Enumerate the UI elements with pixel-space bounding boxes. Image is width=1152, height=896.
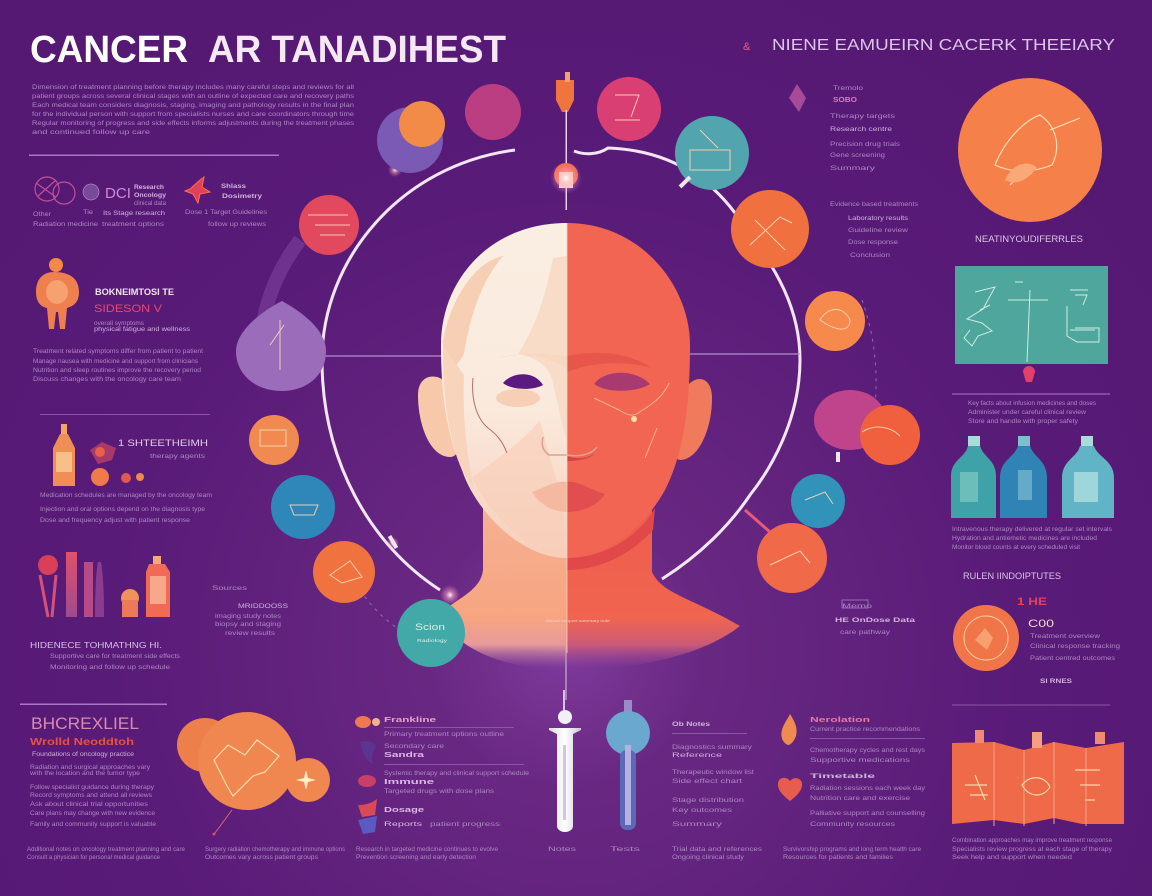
small connector capsules [388, 176, 840, 549]
bottom text strip: Tests [610, 847, 640, 853]
icon row: organs: Other [33, 212, 51, 218]
text block: person: Nutrition and sleep routines improve the recovery period [33, 368, 201, 374]
text block: right upper [830, 202, 918, 259]
panel: far bottom list: Nutrition care and exercise [810, 796, 911, 802]
bottom text strip: Consult a physician for personal medical guidance [27, 855, 161, 861]
icon: star cell [185, 177, 210, 203]
bottom text strip: Seek help and support when needed [952, 855, 1072, 861]
panel: bottom left text: Foundations of oncology practice [32, 752, 135, 758]
icon: orange heart blobs [177, 712, 330, 836]
panel: bottom list left: Secondary care [384, 744, 445, 750]
bubble line art [260, 95, 900, 583]
icon: large orange circle [958, 78, 1102, 222]
bar chart: vials [38, 552, 170, 617]
panel: bottom left text: BHCREXLIEL [31, 714, 139, 733]
divider [952, 394, 1110, 395]
left ear [418, 376, 462, 457]
text block: person [33, 349, 203, 383]
bubble: blue right [791, 474, 845, 528]
illustration: central face [418, 223, 740, 670]
chin shadow [567, 508, 655, 570]
panel: bottom list right: Ob Notes [672, 722, 711, 728]
heading: medication: 1 SHTEETHEIMH [118, 438, 208, 448]
panel: bottom list left: Primary treatment options outline [384, 732, 505, 738]
bottom text strip: Survivorship programs and long term health care [783, 847, 922, 853]
ring arcs and decorative orbit [262, 148, 876, 700]
icon: blue thermometer [606, 700, 650, 830]
bottom text strip: Combination approaches may improve treatment response [952, 838, 1113, 844]
intro text block: patient groups across several clinical stages with an outline of expected care and recovery paths [32, 94, 354, 100]
text block: bottles: Monitor blood counts at every scheduled visit [952, 545, 1080, 551]
heading: person section: physical fatigue and wellness [94, 327, 190, 333]
bottom text strip: Outcomes vary across patient groups [205, 855, 318, 861]
text block: right upper: Guideline review [848, 228, 909, 234]
panel: far bottom list: Timetable [810, 774, 877, 780]
icon: pills [90, 442, 144, 486]
neck and shoulders [445, 500, 567, 670]
forehead peach [518, 256, 567, 444]
panel: bottom list right: Reference [672, 753, 723, 759]
heading: person section [94, 287, 190, 333]
text block: bottles intro: Store and handle with proper safety [968, 419, 1078, 425]
panel: bottom left text: Ask about clinical trial opportunities [30, 802, 148, 808]
intro text block: for the individual person with support from specialists nurses and care coordinators through time [32, 112, 355, 118]
text block: lower center right: care pathway [840, 630, 890, 636]
panel: far bottom list [810, 717, 925, 828]
panel: top right text: Tremolo [833, 86, 864, 92]
text block: vials [30, 641, 180, 671]
panel: orange folded banner [952, 730, 1124, 826]
panel: far bottom list: Palliative support and counselling [810, 811, 925, 817]
icon: blue bottle [1000, 436, 1047, 518]
divider [952, 704, 1110, 706]
bubble: orange top left [399, 101, 445, 147]
icon: small pink bulb [789, 84, 806, 112]
icon row: organs: Its Stage research [103, 211, 165, 217]
panel: bottom list right: Key outcomes [672, 808, 732, 814]
text block: center left notes [212, 586, 288, 637]
divider [40, 414, 210, 415]
intro text block: Each medical team considers diagnosis, staging, imaging and pathology results in the final plan [32, 103, 354, 109]
title: CANCER [30, 29, 188, 71]
text block: right upper: Evidence based treatments [830, 202, 918, 208]
text block: right upper: Dose response [848, 240, 899, 246]
left eye [496, 354, 567, 407]
text block: person: Manage nausea with medicine and support from clinicians [33, 359, 198, 365]
panel: top right text: Therapy targets [830, 114, 895, 120]
text block: medication: Dose and frequency adjust with patient response [40, 518, 191, 524]
panel: bottom list left: Immune [384, 779, 434, 786]
panel: far bottom list: Current practice recommendations [810, 727, 920, 733]
panel: bottom list left [355, 716, 530, 834]
icon: orange bulb [781, 714, 797, 745]
icon: pale bottle [1062, 436, 1114, 518]
text block: center left notes: biopsy and staging [215, 622, 281, 628]
panel: bottom list left: Reports [384, 822, 422, 828]
text block: bottles [952, 527, 1112, 551]
text block: target: 1 HE [1017, 596, 1047, 608]
panel: bottom list left: Targeted drugs with dose plans [384, 789, 494, 795]
label: data: DCI [105, 185, 131, 202]
text block: medication: Injection and oral options depend on the diagnosis type [40, 507, 206, 513]
left half of face [441, 223, 567, 558]
icon: bottle [53, 424, 75, 486]
right ear [670, 379, 712, 460]
bubble: pink top [465, 84, 521, 140]
intro text block: and continued follow up care [32, 130, 151, 136]
bottom text strip: Specialists review progress at each stage of therapy [952, 847, 1112, 853]
bubble: pink top right [597, 77, 661, 141]
text block: target: Treatment overview [1030, 634, 1101, 640]
neck text: clinical support summary note [545, 618, 611, 623]
heading: medication [118, 438, 208, 460]
title: AR TANADIHEST [208, 29, 506, 71]
panel: far bottom list: Nerolation [810, 717, 870, 724]
panel: bottom list right: Summary [672, 822, 722, 828]
title [30, 29, 506, 71]
intro text block [32, 85, 355, 136]
bubble: orange left [249, 415, 299, 465]
bottom text strip: Surgery radiation chemotherapy and immune options [205, 847, 345, 853]
outer cheek skin [443, 345, 474, 490]
icon row: organs: Oncology [134, 193, 167, 199]
panel: far bottom list: Radiation sessions each week day [810, 786, 925, 792]
text block: target [1017, 596, 1120, 685]
text block: vials: HIDENECE TOHMATHNG HI. [30, 641, 162, 650]
text block: target: Patient centred outcomes [1030, 656, 1115, 662]
text block: bottles intro: Key facts about infusion medicines and doses [968, 401, 1096, 407]
glow dots [388, 163, 402, 177]
text block: center left notes: imaging study notes [215, 614, 281, 620]
icon: person [36, 258, 79, 329]
bubble: blue left [271, 475, 335, 539]
text block: medication [40, 493, 212, 524]
text block: right upper: Laboratory results [848, 216, 908, 222]
bubble: orange right [731, 190, 809, 268]
heading: differences: NEATINYOUDIFERRLES [975, 234, 1083, 245]
right eye [567, 353, 669, 458]
icon row: star: follow up reviews [208, 222, 266, 228]
panel: bottom left text [20, 704, 167, 828]
bottom text strip: Notes [548, 847, 576, 853]
lips [532, 482, 567, 512]
panel: bottom list right: Therapeutic window list [672, 770, 754, 776]
bubble: pink right [814, 390, 886, 450]
icon row: star: Dose 1 Target Guidelines [185, 210, 267, 216]
bottom text strip: Prevention screening and early detection [356, 855, 476, 861]
text block: lower center right: Memo [842, 604, 873, 610]
heading: medication: therapy agents [150, 454, 205, 460]
right half of face [567, 223, 690, 558]
panel: bottom left text: with the location and the tumor type [29, 771, 141, 777]
text block: person: Discuss changes with the oncology care team [33, 377, 181, 383]
right heading: NIENE EAMUEIRN CACERK THEEIARY [772, 37, 1115, 54]
heading: person section: overall symptoms [94, 321, 144, 327]
panel: bottom left text: Record symptoms and attend all reviews [30, 793, 152, 799]
icon row: organs: Tie [83, 210, 94, 216]
panel: bottom list right: Diagnostics summary [672, 745, 752, 751]
panel: bottom list left: Frankline [384, 717, 436, 724]
panel: top right text [789, 84, 900, 172]
cheek shade [472, 420, 567, 558]
text block: center left notes: Sources [212, 586, 247, 592]
icon: top device [550, 72, 582, 210]
bubble: large purple [236, 301, 326, 391]
panel: bottom list left: Systemic therapy and clinical support schedule [384, 771, 530, 777]
heading: person section: BOKNEIMTOSI TE [95, 287, 174, 298]
text block: center left notes: review results [225, 631, 275, 637]
bottom text strip [27, 838, 1113, 861]
icon: teal bottle [951, 436, 996, 518]
bubble: teal bottom: Radiology [417, 638, 448, 643]
scar line [473, 378, 507, 453]
text block: bottles intro: Administer under careful clinical review [968, 410, 1087, 416]
bubble: teal top right [675, 116, 749, 190]
divider [29, 154, 279, 156]
panel: top right text: Gene screening [830, 153, 885, 159]
bubble: teal bottom [397, 599, 465, 667]
icon row: star [185, 177, 267, 228]
forehead streak [443, 256, 503, 373]
icon: small cell [83, 184, 99, 200]
panel: top right text: Research centre [830, 127, 893, 133]
midline [566, 223, 568, 653]
text block: lower center right [835, 600, 916, 636]
icon row: organs [33, 177, 167, 228]
panel: bottom list right: Stage distribution [672, 798, 744, 804]
bottom text strip: Trial data and references [672, 847, 762, 853]
bubble: orange mid right [805, 291, 865, 351]
icon: orange target [953, 605, 1019, 671]
heading: person section: SIDESON V [94, 303, 163, 315]
icon row: star: Shlass [221, 184, 247, 190]
panel: bottom left text: Family and community support is valuable [30, 822, 157, 828]
text block: lower center right: HE OnDose Data [835, 618, 916, 624]
text block: bottles: Intravenous therapy delivered at regular set intervals [952, 527, 1112, 533]
icon: small mushroom [1023, 366, 1035, 382]
panel: bottom left text: Radiation and surgical approaches vary [30, 765, 150, 771]
orbit bubbles [236, 77, 920, 603]
panel: bottom list left: Sandra [384, 752, 424, 759]
panel: bottom list right [672, 722, 754, 828]
panel: bottom list left: Dosage [384, 807, 424, 814]
panel: top right text: Summary [830, 166, 875, 172]
text block: target: Clinical response tracking [1030, 644, 1120, 650]
text block: right upper: Conclusion [850, 253, 890, 259]
text block: target: SI RNES [1040, 679, 1072, 685]
panel: bottom list right: Side effect chart [672, 779, 743, 785]
icon: organ cell [35, 177, 75, 204]
nose [542, 437, 597, 456]
icon: list markers [355, 716, 380, 834]
text block: vials: Monitoring and follow up schedule [50, 665, 171, 671]
bubble: purple blue [377, 107, 443, 173]
bubble: teal bottom: Scion [415, 622, 445, 632]
right heading: & [743, 41, 751, 53]
panel: far bottom list: Community resources [810, 822, 895, 828]
icon row: organs: Research [134, 185, 164, 191]
icon: heart [778, 778, 802, 801]
bottom text strip: Resources for patients and families [783, 855, 893, 861]
panel: bottom left text: Wrolld Neoddtoh [30, 737, 134, 748]
icon row: organs: treatment options [102, 222, 164, 228]
bottom text strip: Additional notes on oncology treatment planning and care [27, 847, 186, 853]
bubble: coral lower right [757, 523, 827, 593]
panel: top right text: Precision drug trials [830, 142, 900, 148]
text block: center left notes: MRIDDOOSS [238, 604, 288, 610]
bubble: red left [299, 195, 359, 255]
icon: white thermometer [549, 690, 581, 832]
icon row: organs: Radiation medicine [33, 222, 99, 228]
text block: bottles: Hydration and antiemetic medicines are included [952, 536, 1097, 542]
panel: bottom left text: Care plans may change with new evidence [30, 811, 156, 817]
text block: person: Treatment related symptoms differ from patient to patient [33, 349, 203, 355]
text block: bottles intro [968, 401, 1096, 425]
text block: vials: Supportive care for treatment side effects [50, 654, 180, 660]
panel: far bottom list: Supportive medications [810, 758, 910, 764]
intro text block: Dimension of treatment planning before therapy includes many careful steps and reviews for all [32, 85, 354, 91]
panel: top right text: SOBO [833, 97, 858, 104]
panel: teal diagram [955, 266, 1108, 364]
bubble: orange right lower [860, 405, 920, 465]
bubble: orange lower left [313, 541, 375, 603]
panel: far bottom list: Chemotherapy cycles and rest days [810, 748, 925, 754]
bottom text strip: Research in targeted medicine continues to evolve [356, 847, 499, 853]
panel: bottom list left: patient progress [430, 822, 500, 828]
panel: bottom left text: Follow specialist guidance during therapy [30, 785, 154, 791]
heading: lower right: RULEN IINDOIPTUTES [963, 571, 1061, 582]
text block: target: C00 [1028, 618, 1054, 630]
text block: medication: Medication schedules are managed by the oncology team [40, 493, 212, 499]
icon row: star: Dosimetry [222, 194, 263, 200]
intro text block: Regular monitoring of progress and side effects informs adjustments during the treatment phases [32, 121, 354, 127]
icon row: organs: clinical data [134, 201, 167, 207]
bottom text strip: Ongoing clinical study [672, 855, 744, 861]
